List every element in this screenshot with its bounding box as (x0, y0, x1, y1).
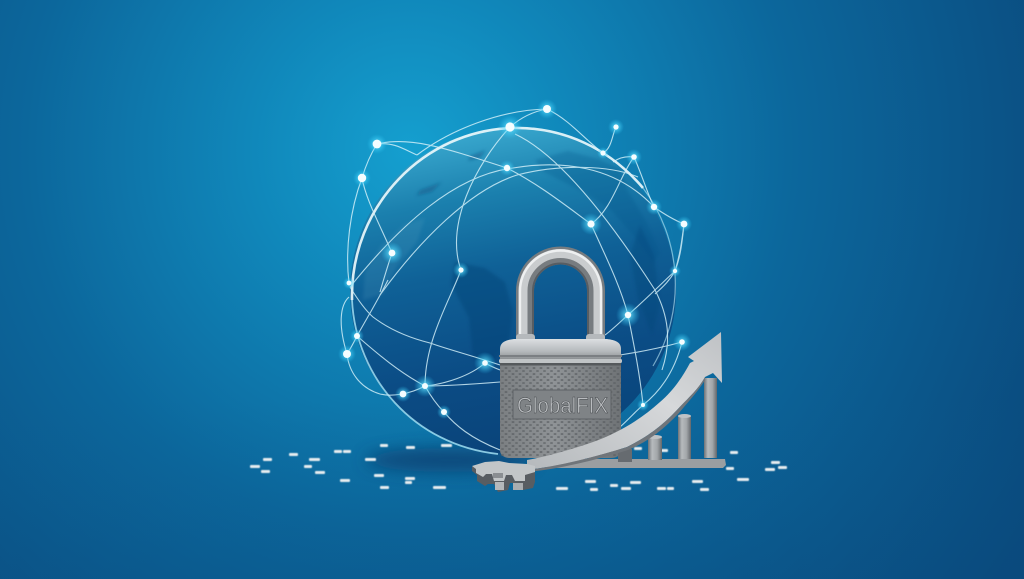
globe shadow on floor (365, 448, 535, 472)
lock label text: GlobalFIX (517, 393, 608, 418)
lock cap (500, 339, 621, 362)
padlock (499, 251, 622, 458)
network nodes (338, 99, 692, 419)
lock label plate (513, 390, 611, 419)
shackle (520, 251, 601, 342)
globe rim (352, 128, 643, 300)
scattered particles (250, 444, 787, 491)
wrench-shaped arrow tail (472, 461, 535, 492)
globe (350, 128, 676, 454)
continents (363, 150, 660, 366)
network lines (341, 109, 684, 450)
growth bars (545, 378, 726, 468)
lock body (500, 362, 621, 458)
growth arrow (472, 332, 722, 492)
